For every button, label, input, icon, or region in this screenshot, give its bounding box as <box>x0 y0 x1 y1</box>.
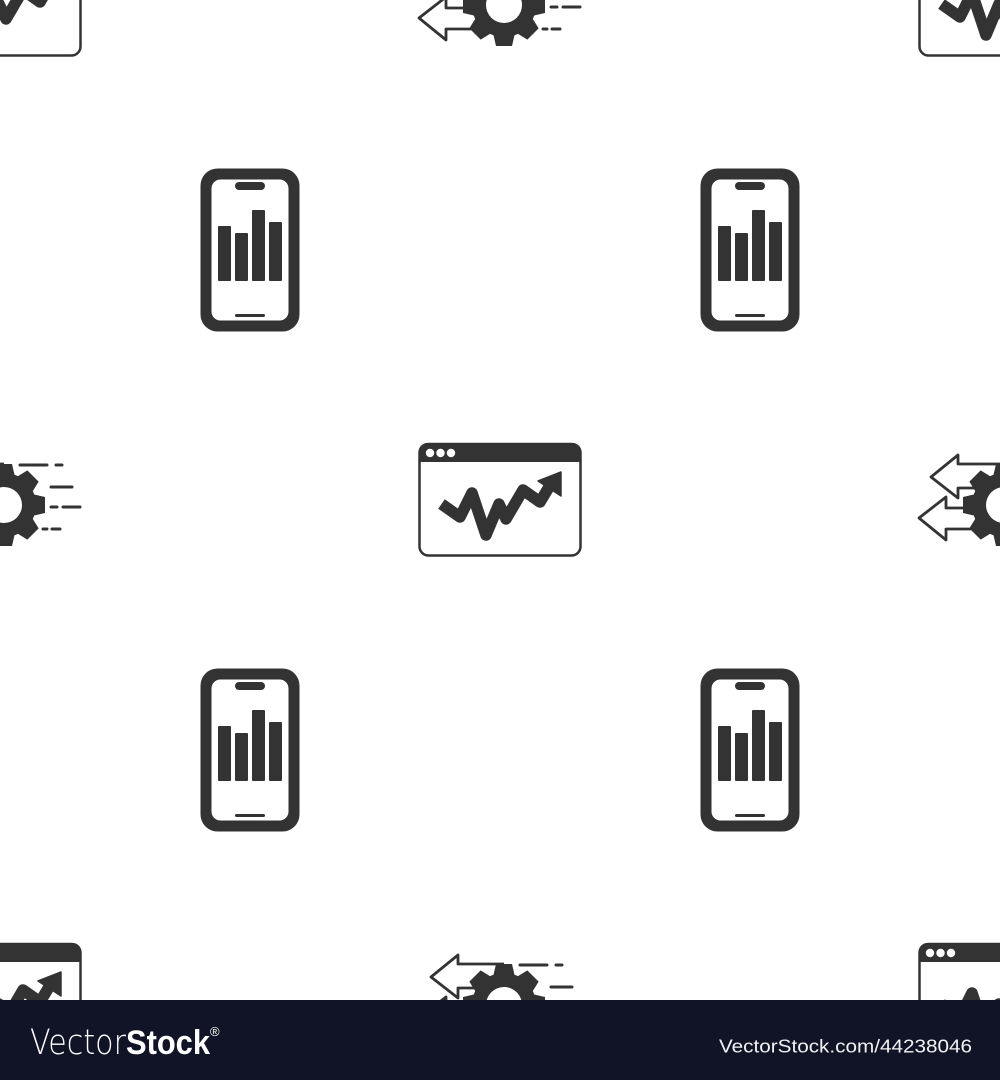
icon: web chart window, bottom left <box>0 943 82 1056</box>
brand logo text: ® <box>210 1024 220 1039</box>
icon: web chart window, centre <box>418 443 582 556</box>
icon: gear with arrows, top centre <box>419 0 580 46</box>
icon: gear with speed lines, middle left <box>0 455 80 546</box>
image id url: VectorStock.com/44238046 <box>719 1036 972 1056</box>
icon: gear with arrows, middle right <box>919 455 1000 546</box>
icon: web chart window, top right <box>918 0 1000 56</box>
brand logo text: Stock <box>126 1024 210 1062</box>
icon: gear with arrows, bottom centre <box>419 955 580 1046</box>
brand logo text <box>30 1023 220 1063</box>
icon: phone bar chart, lower right <box>700 668 800 832</box>
brand logo text: Vector <box>30 1023 127 1063</box>
icon: web chart window, top left <box>0 0 82 56</box>
icon: phone bar chart, upper right <box>700 168 800 332</box>
footer bar <box>0 1000 1000 1080</box>
icon: web chart window, bottom right <box>918 943 1000 1056</box>
icon: phone bar chart, upper left <box>200 168 300 332</box>
icon: phone bar chart, lower left <box>200 668 300 832</box>
